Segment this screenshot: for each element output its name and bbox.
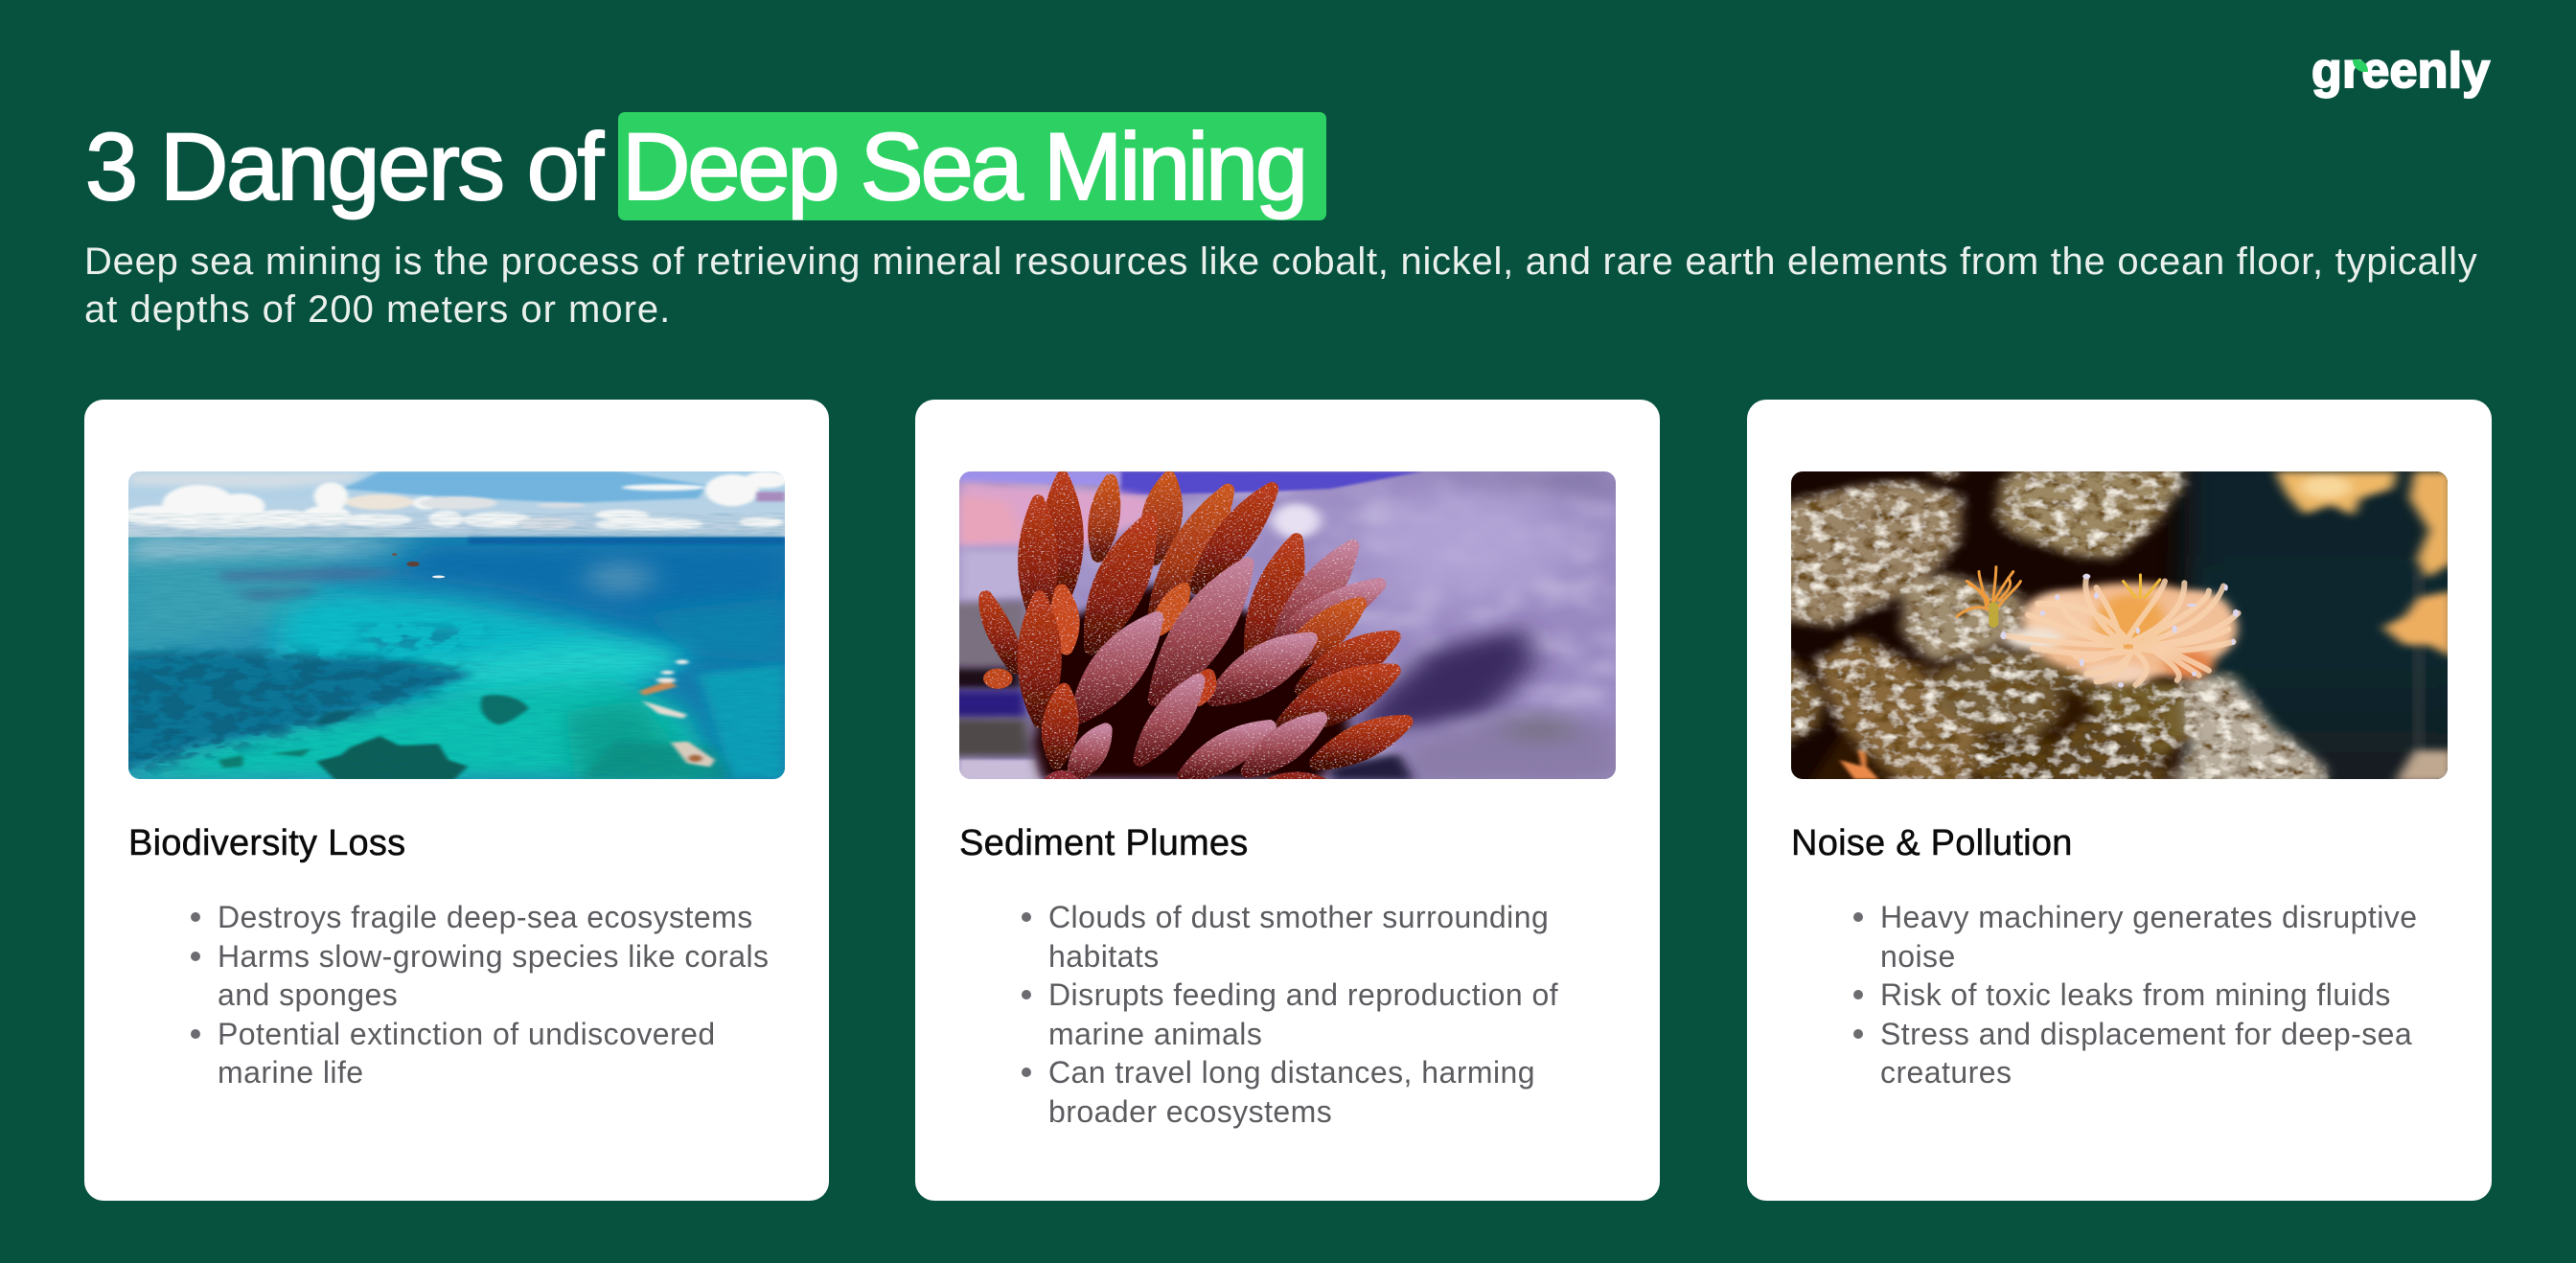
bullet list: habitats [1048, 939, 1160, 974]
bullet list: Potential extinction of undiscovered [218, 1017, 716, 1051]
title text: highlighted: Deep Sea Mining [622, 113, 1305, 219]
bullet list: Risk of toxic leaks from mining fluids [1880, 977, 2391, 1012]
subtitle [84, 241, 2477, 331]
coral branches [983, 477, 1407, 781]
photo: red coral [959, 471, 1616, 779]
panel: Biodiversity Loss [84, 400, 829, 1201]
sky [123, 471, 789, 538]
title text: lead: 3 Dangers of [85, 113, 602, 219]
bullet list: creatures [1880, 1055, 2012, 1090]
bullet list: Destroys fragile deep-sea ecosystems [218, 900, 753, 934]
large peach anemone [2000, 574, 2239, 687]
panel: Sediment Plumes [915, 400, 1660, 1201]
rocky islets [639, 659, 715, 767]
bullet list: noise [1880, 939, 1956, 974]
bullet list: broader ecosystems [1048, 1094, 1332, 1129]
bullet list: Heavy machinery generates disruptive [1880, 900, 2417, 934]
heading: Noise & Pollution: Noise & Pollution [1791, 823, 2073, 863]
blurred orange corals [2275, 471, 2453, 782]
heading: Sediment Plumes: Sediment Plumes [959, 823, 1249, 863]
bullet list: Harms slow-growing species like corals [218, 939, 769, 974]
coral base [1032, 585, 1350, 779]
bullet list: marine animals [1048, 1017, 1262, 1051]
blurred seabed background [939, 471, 1624, 786]
bullet list [1853, 900, 2417, 1090]
rocks [1779, 468, 2324, 786]
small orange anemone [1957, 567, 2020, 623]
panel: Noise & Pollution [1747, 400, 2492, 1201]
subtitle: Deep sea mining is the process of retrieving mineral resources like cobalt, nickel, and rare earth elements from the ocean floor, typically [84, 241, 2477, 283]
sea [116, 538, 785, 781]
bullet list [191, 900, 769, 1090]
bullet list: and sponges [218, 977, 398, 1012]
bullet list [1022, 900, 1558, 1129]
logo: greenly: greenly [2312, 43, 2490, 99]
heading: Biodiversity Loss: Biodiversity Loss [128, 823, 405, 863]
bullet list: marine life [218, 1055, 364, 1090]
bullet list: Stress and displacement for deep-sea [1880, 1017, 2412, 1051]
dark water background [1791, 457, 2478, 795]
subtitle: at depths of 200 meters or more. [84, 288, 671, 331]
fish [1840, 749, 1878, 779]
photo: anemone on rocks [1791, 471, 2448, 779]
title highlight box [618, 112, 1326, 220]
title [85, 112, 1326, 220]
bullet list: Disrupts feeding and reproduction of [1048, 977, 1558, 1012]
bullet list: Clouds of dust smother surrounding [1048, 900, 1549, 934]
bullet list: Can travel long distances, harming [1048, 1055, 1535, 1090]
photo: aerial turquoise ocean [128, 471, 785, 779]
boats [392, 553, 445, 578]
